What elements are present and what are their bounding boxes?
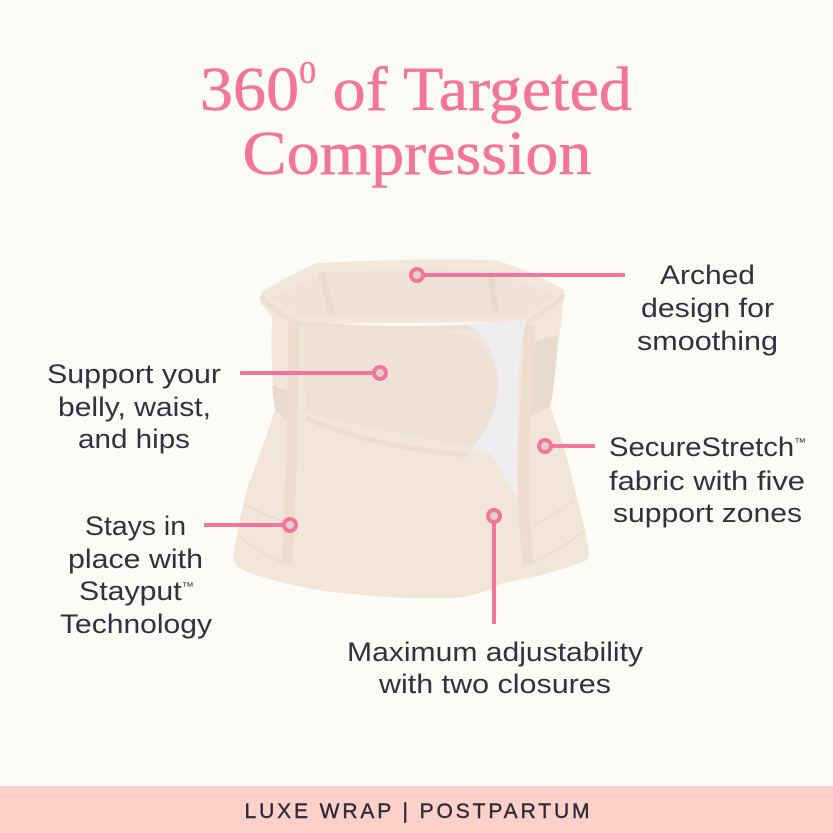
callout: securestretch [539,432,806,528]
callout: stays in place: Stays in [85,511,186,541]
title [200,54,632,188]
lower closure flap [298,418,518,597]
callout: securestretch: fabric with five [609,466,805,496]
outer body [233,293,589,598]
footer band [0,786,833,833]
white hook panel [466,320,527,497]
upper closure flap [303,326,498,446]
footer band: LUXE WRAP | POSTPARTUM [244,800,590,823]
title: 0 [299,54,316,90]
callout: securestretch: SecureStretch [609,432,780,462]
callout: support [47,359,386,454]
callout: arched design: Arched [660,260,755,290]
callout: adjustability [347,510,644,699]
callout: securestretch: support zones [613,498,802,528]
title: of Targeted [316,56,632,124]
callout: stays in place [60,511,296,639]
callout: support: and hips [78,424,190,454]
callout: support: Support your [47,359,221,389]
callout: securestretch: ™ [794,437,806,449]
callout: adjustability: with two closures [378,669,611,699]
title: Compression [242,120,592,188]
product: waist wrap garment [233,259,589,598]
title: 360 [200,56,293,124]
callout: arched design [411,260,778,356]
callout: stays in place: ™ [182,581,194,593]
shaded waist bands [272,335,558,425]
callout: stays in place: place with [68,544,203,574]
callout: stays in place: Stayput [79,576,171,606]
rim binding [261,294,564,329]
callout: adjustability: Maximum adjustability [347,637,644,667]
inner back panel [261,259,564,324]
callout: arched design: smoothing [637,326,778,356]
callout: arched design: design for [641,293,774,323]
lower layered hem lines [238,500,585,562]
vertical seams [287,322,294,565]
callout: stays in place: Technology [60,609,213,639]
callout: support: belly, waist, [58,392,211,422]
